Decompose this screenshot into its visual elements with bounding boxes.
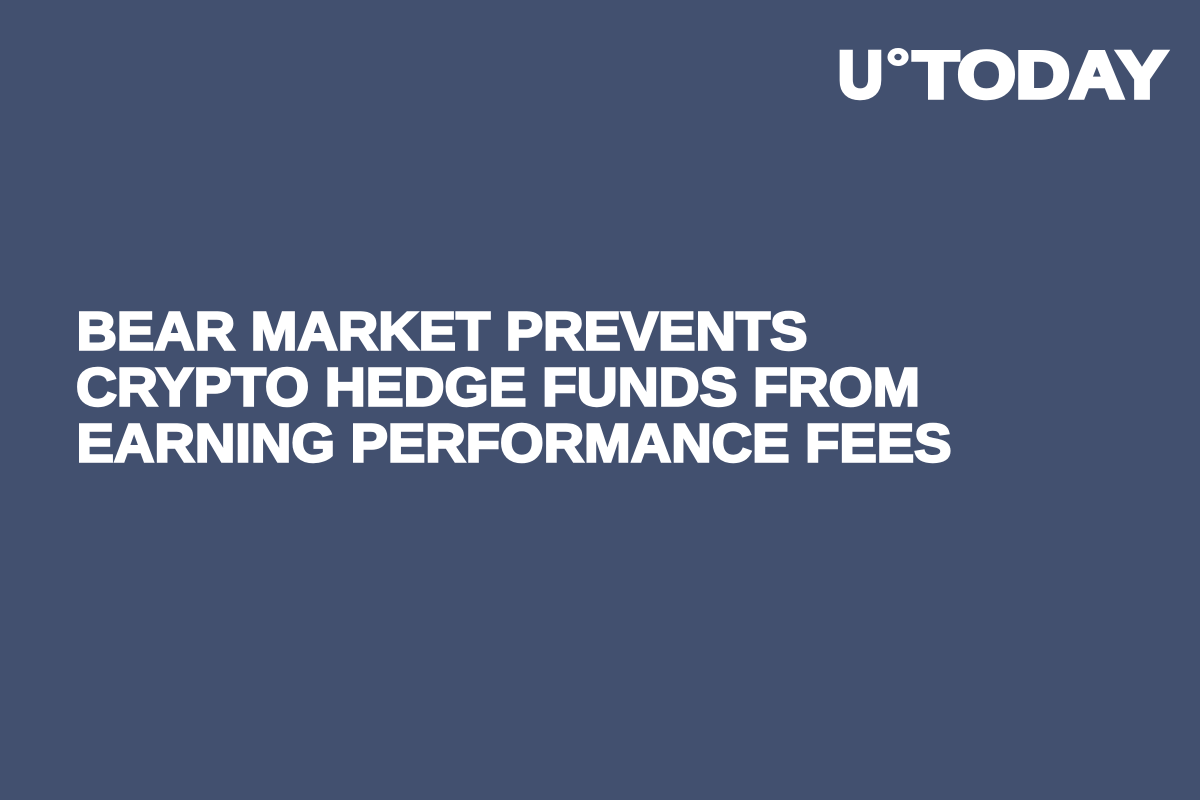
logo: U°TODAY bbox=[838, 38, 1167, 112]
logo: U°TODAY: ° bbox=[886, 39, 910, 97]
logo: U°TODAY: U bbox=[838, 38, 883, 112]
title: CRYPTO HEDGE FUNDS FROM bbox=[76, 358, 920, 418]
logo: U°TODAY: TODAY bbox=[913, 38, 1167, 112]
title: BEAR MARKET PREVENTS bbox=[76, 302, 808, 362]
title bbox=[76, 302, 952, 474]
title: EARNING PERFORMANCE FEES bbox=[76, 414, 952, 474]
